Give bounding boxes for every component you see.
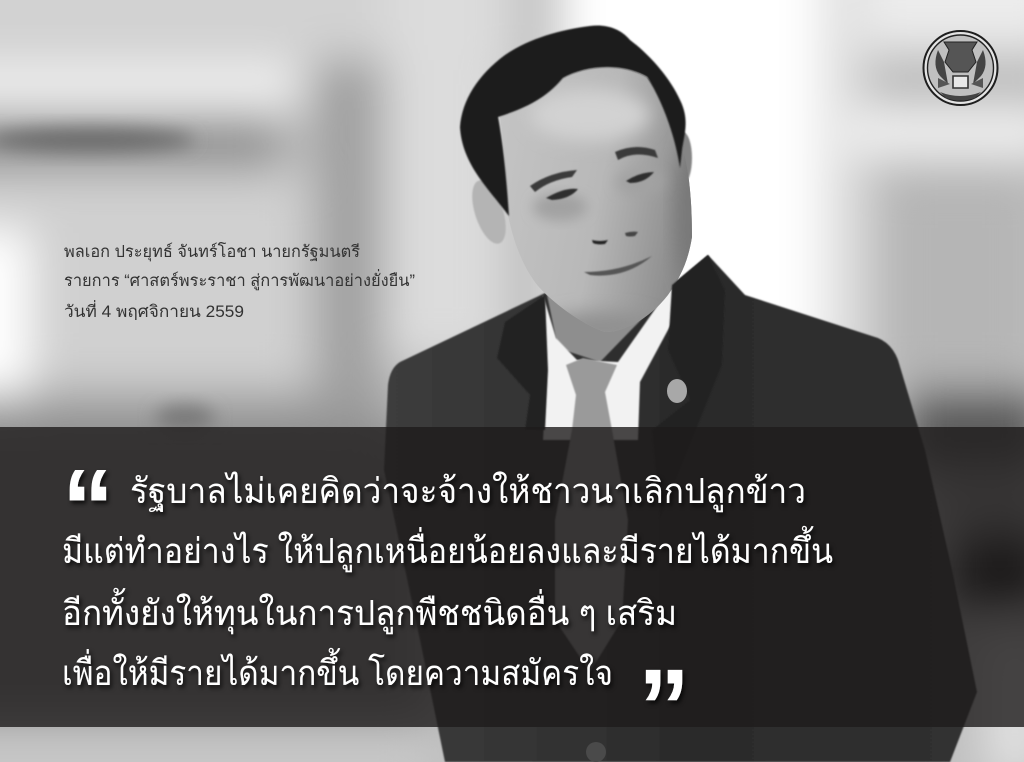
ear left (465, 176, 513, 248)
left lapel (497, 295, 548, 430)
caption text: วันที่ 4 พฤศจิกายน 2559 (64, 300, 244, 321)
right lapel (652, 255, 725, 520)
hair (460, 26, 686, 216)
facial features (530, 147, 658, 276)
dark quote band (0, 427, 1024, 727)
lapel pin (667, 379, 687, 403)
quote text: อีกทั้งยังให้ทุนในการปลูกพืชชนิดอื่น ๆ เสริม (62, 587, 677, 634)
caption text: พลเอก ประยุทธ์ จันทร์โอชา นายกรัฐมนตรี (64, 242, 360, 262)
ear right (674, 132, 692, 184)
government seal (924, 31, 998, 105)
chin shade (564, 306, 645, 332)
eye socket shade right (622, 177, 627, 184)
necktie (555, 358, 628, 672)
jacket (384, 255, 977, 762)
caption text: รายการ “ศาสตร์พระราชา สู่การพัฒนาอย่างยั่งยืน” (64, 269, 415, 291)
quote text: รัฐบาลไม่เคยคิดว่าจะจ้างให้ชาวนาเลิกปลูกข้าว (130, 471, 806, 512)
eye socket shade left (533, 193, 587, 221)
neck (545, 260, 670, 362)
person (384, 26, 977, 762)
jacket button (586, 742, 606, 762)
right cheek shade (670, 149, 692, 278)
quote text: เพื่อให้มีรายได้มากขึ้น โดยความสมัครใจ (62, 647, 613, 693)
quote text (62, 447, 833, 762)
caption text (64, 242, 415, 321)
forehead highlight (530, 89, 650, 141)
quote text: มีแต่ทำอย่างไร ให้ปลูกเหนื่อยน้อยลงและมีรายได้มากขึ้น (62, 525, 833, 572)
face (500, 67, 692, 330)
opening quotation mark: “ (62, 447, 114, 567)
shirt (543, 285, 676, 440)
